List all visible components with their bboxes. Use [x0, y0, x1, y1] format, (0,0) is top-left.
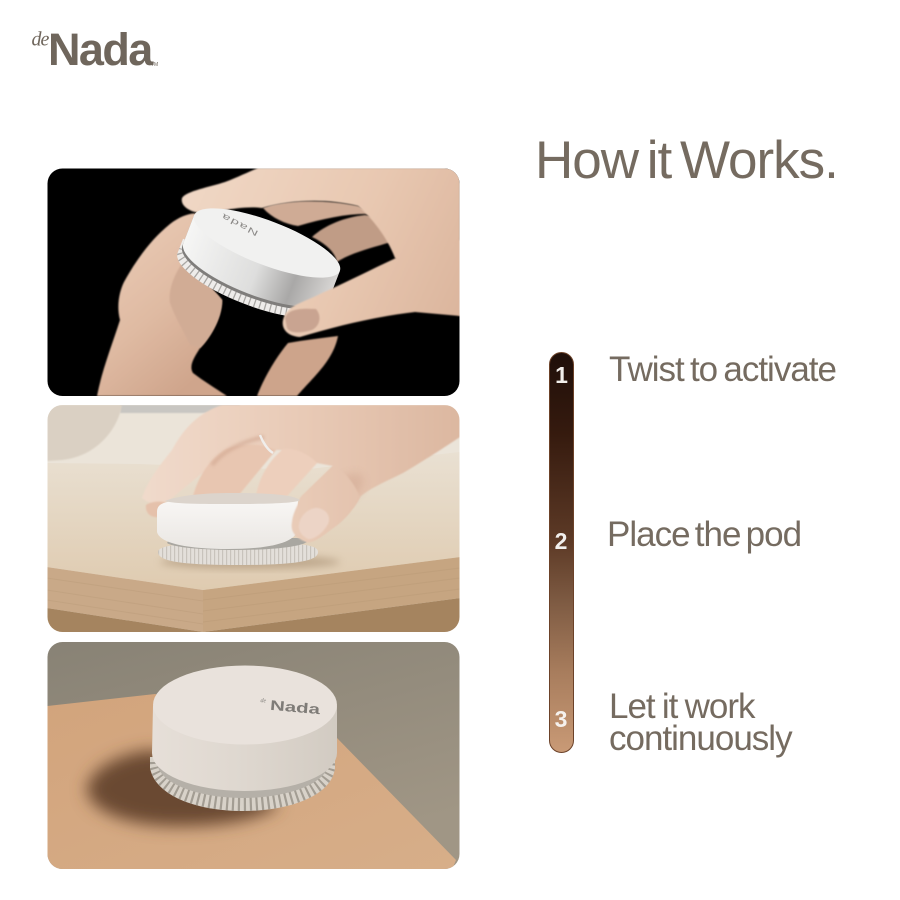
pod ring: [158, 544, 318, 565]
wood grain: [47, 568, 460, 624]
pod body: [152, 706, 337, 791]
middle fingers of right hand: [263, 201, 391, 262]
table below: [47, 598, 460, 633]
logo: TM: [151, 62, 158, 68]
panel: continuous photo: [47, 642, 460, 870]
pod body: [157, 501, 298, 549]
wooden table: [47, 694, 456, 870]
ring: [260, 435, 273, 453]
left hand inner fingers: [170, 262, 222, 348]
progress bar: [550, 352, 574, 752]
finger shadow: [212, 437, 264, 465]
pod top: [194, 208, 340, 278]
step 3 label: continuously: [609, 719, 793, 758]
panel: twist photo: [47, 168, 460, 397]
step 2 label: Place the pod: [607, 515, 801, 554]
step number 2: 2: [555, 528, 567, 554]
thumbnail: [299, 508, 329, 539]
cast shadow: [87, 750, 280, 826]
pod: [177, 208, 340, 316]
pod logo: Nada: [269, 697, 321, 717]
pod shadow: [160, 555, 340, 569]
ridged ring: [177, 238, 292, 316]
title: How it Works.: [535, 131, 838, 190]
pod logo: de: [260, 698, 267, 704]
thumbnail: [285, 309, 319, 332]
pod shadow band: [167, 538, 307, 550]
table top: [47, 452, 460, 590]
logo: de: [32, 28, 50, 50]
right hand index finger: [182, 168, 460, 316]
knuckle shading: [348, 474, 362, 492]
pod label: Nada: [219, 211, 260, 238]
pod ring: [150, 757, 335, 811]
thumb: [291, 476, 358, 542]
step 3 label: [609, 687, 793, 758]
pod top: [153, 666, 337, 744]
table front left: [47, 567, 203, 632]
pod top: [165, 493, 300, 504]
step 3 label: Let it work: [609, 687, 756, 726]
step number 3: 3: [555, 706, 567, 732]
logo: Nada: [48, 24, 154, 75]
left hand: [97, 213, 227, 396]
hand and fingers: [143, 405, 460, 518]
panel: place photo: [47, 405, 460, 633]
table front right: [203, 557, 460, 632]
bottom finger: [257, 336, 338, 396]
step 1 label: Twist to activate: [609, 350, 836, 389]
right thumb: [283, 240, 460, 337]
ring inner band: [158, 766, 326, 798]
pod logo: [260, 698, 320, 714]
pod body: [182, 216, 340, 308]
step number 1: 1: [555, 362, 568, 388]
bowl: [47, 405, 122, 461]
